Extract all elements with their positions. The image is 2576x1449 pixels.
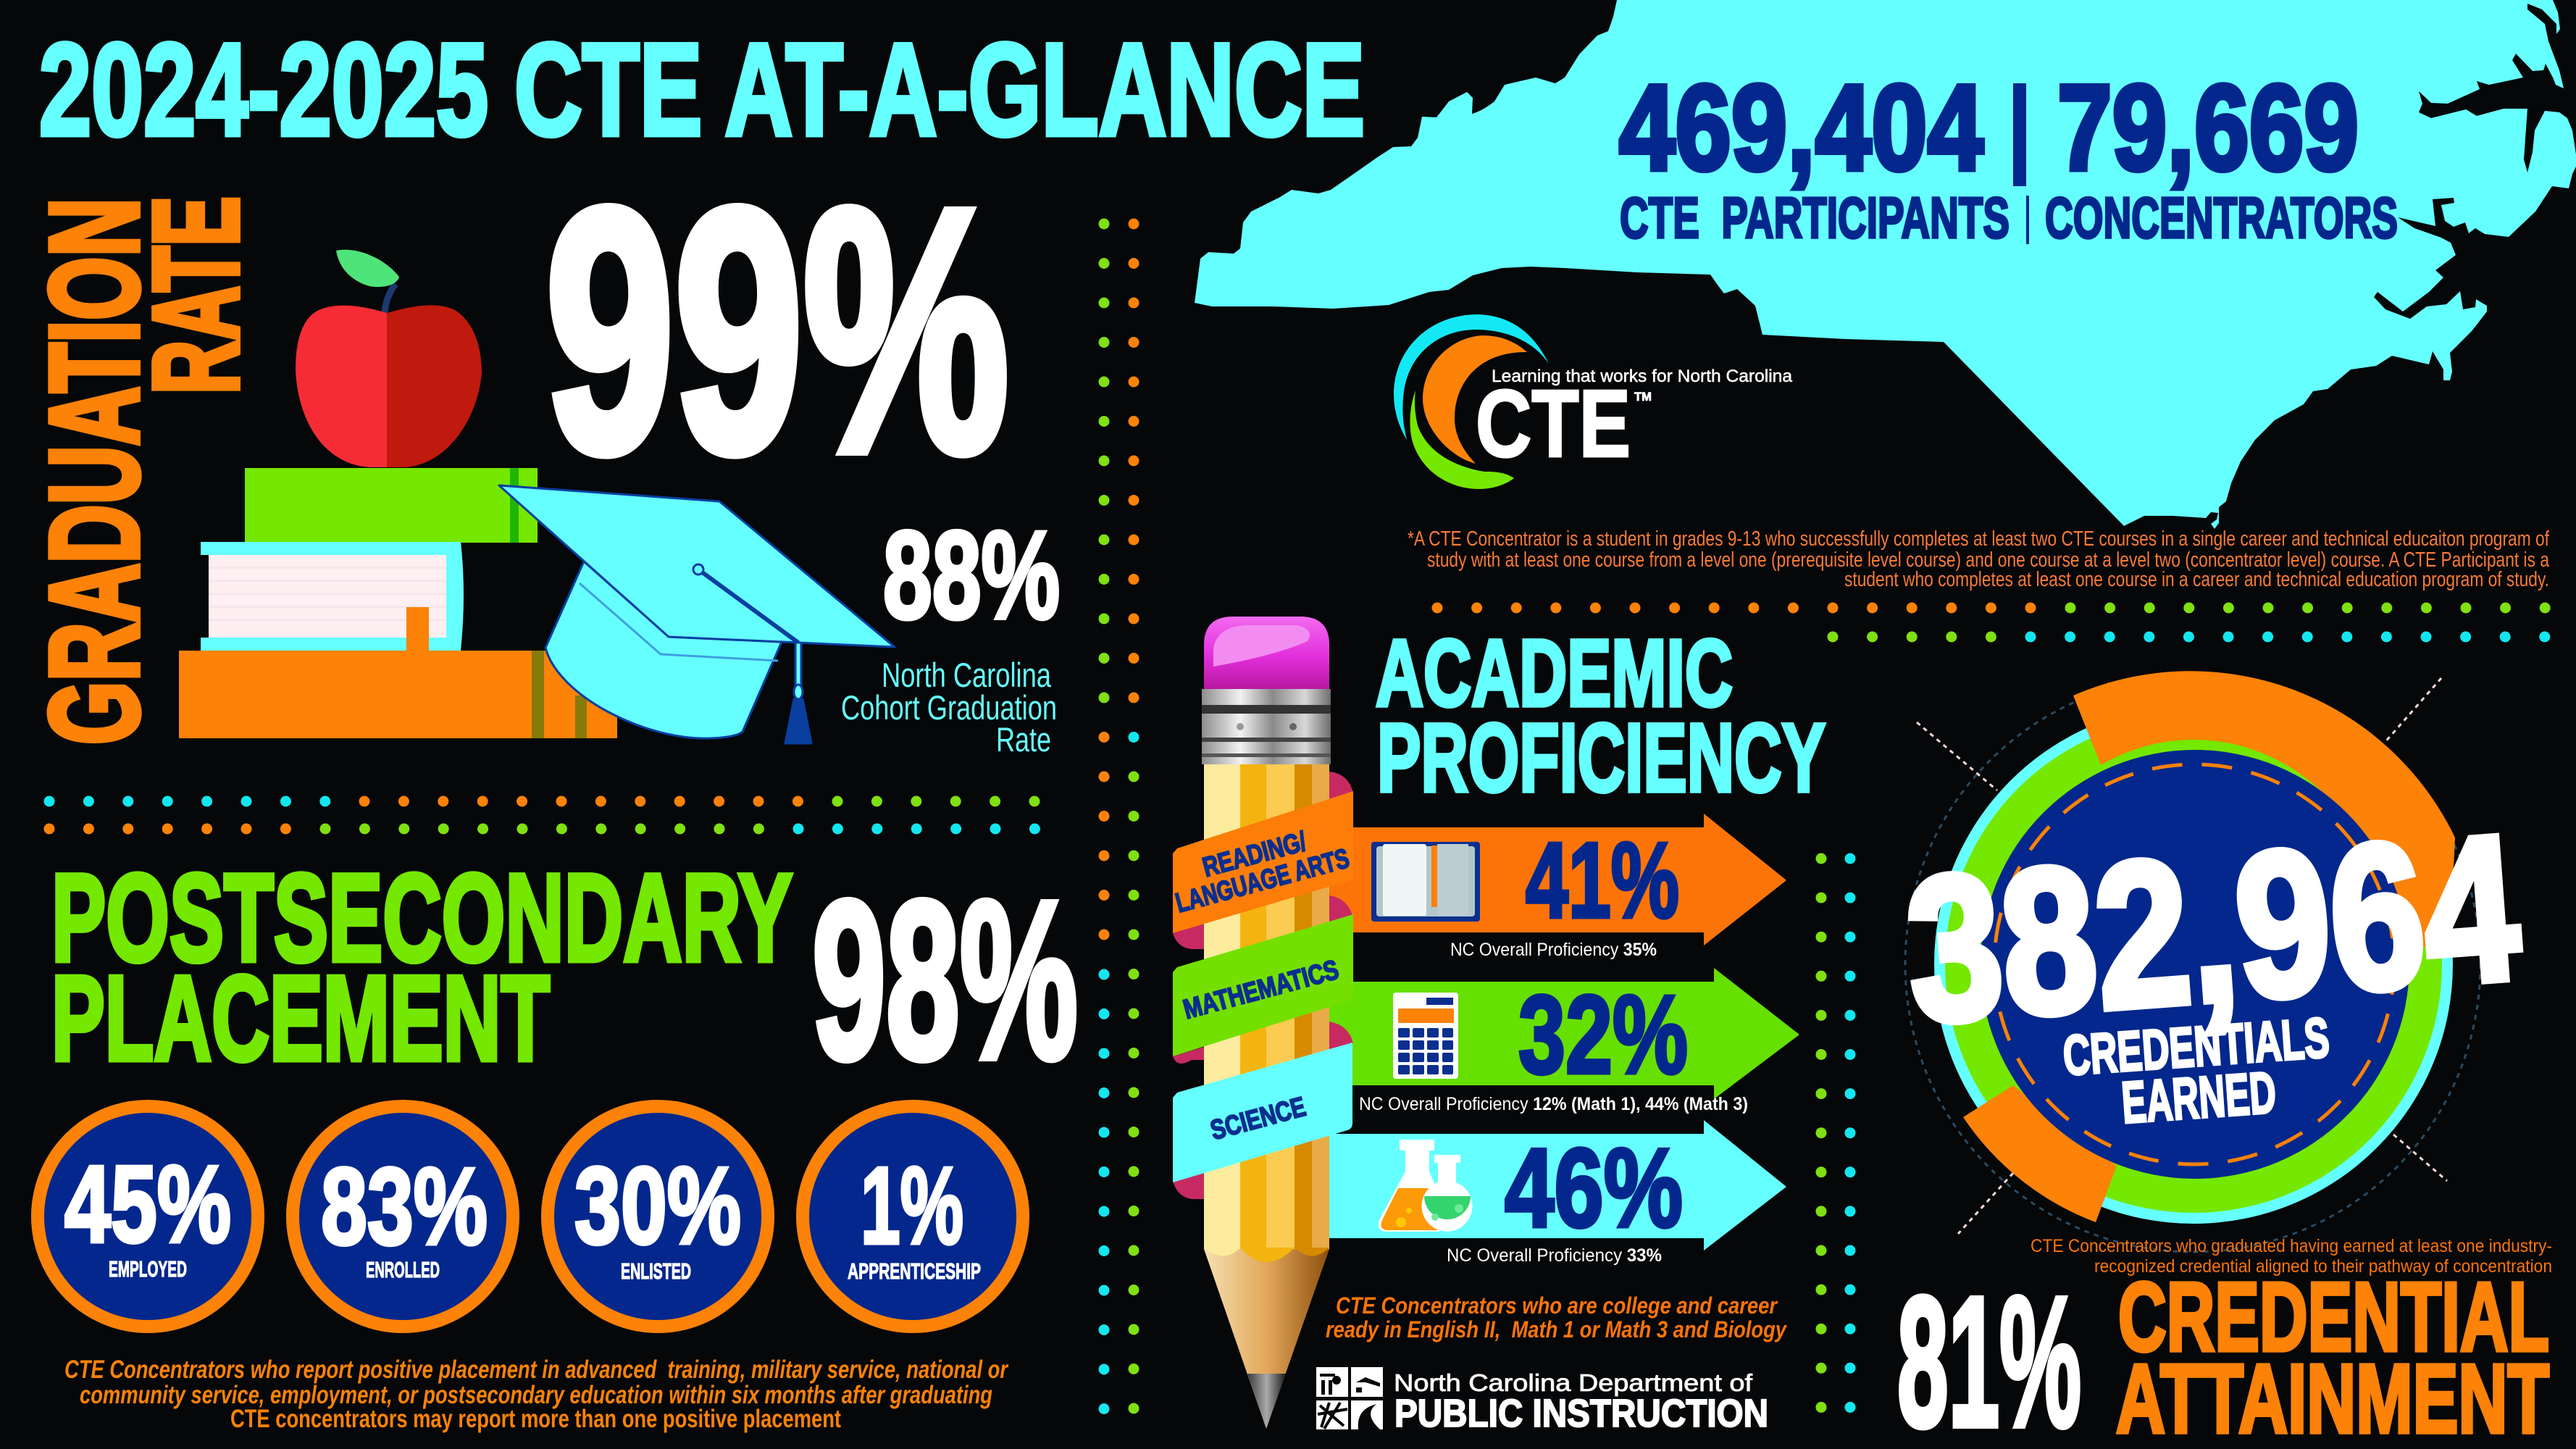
heading: graduation rate: RATE	[129, 196, 264, 394]
CTE logo: Learning that works for North Carolina	[1492, 367, 1793, 386]
heading: credential attainment	[2116, 1262, 2549, 1449]
icon: calculator	[1393, 993, 1458, 1079]
stat: science 46%: 46%	[1505, 1125, 1683, 1250]
badge: apprenticeship: APPRENTICESHIP	[848, 1258, 981, 1284]
panel: postsecondary placement	[38, 848, 1078, 1433]
text: college and career ready note: CTE Concentrators who are college and career	[1336, 1293, 1778, 1319]
heading: postsecondary placement: POSTSECONDARY	[51, 848, 793, 987]
dial: credentials earned circle	[1905, 671, 2480, 1252]
arrow: science	[1329, 1120, 1786, 1250]
participants and concentrators labels: CTE PARTICIPANTS	[1620, 185, 2010, 250]
label: credentials earned	[2061, 1006, 2331, 1136]
icon: flasks	[1379, 1140, 1472, 1232]
text: placement note: CTE concentrators may report more than one positive placement	[230, 1405, 841, 1433]
text: cohort graduation rate label: Rate	[996, 720, 1051, 759]
dots: upper right horizontal rows	[1437, 608, 2554, 637]
caption: mathematics NC proficiency: NC Overall Proficiency 12% (Math 1), 44% (Math 3)	[1359, 1094, 1748, 1114]
ribbon: reading / language arts: READING/	[1200, 827, 1310, 883]
text: credential note	[2031, 1236, 2552, 1277]
text: college and career ready note: ready in English II, Math 1 or Math 3 and Biology	[1326, 1316, 1788, 1342]
badge: enrolled: 83%	[321, 1145, 488, 1267]
badge: apprenticeship: 1%	[861, 1144, 963, 1266]
dots: centre vertical columns	[1104, 224, 1134, 1410]
ribbon: science: SCIENCE	[1208, 1092, 1309, 1146]
ribbon: mathematics	[1173, 914, 1353, 1056]
text: placement note: community service, employment, or postsecondary education within six months after graduating	[80, 1381, 992, 1409]
dots: left horizontal rows	[49, 801, 1037, 829]
participants and concentrators numbers	[1619, 59, 2359, 196]
title: 2024-2025 CTE AT-A-GLANCE	[39, 17, 1365, 163]
NC Department of Public Instruction logo	[1316, 1367, 1768, 1435]
badge: employed: 45%	[64, 1143, 231, 1265]
heading: graduation rate	[23, 196, 264, 745]
heading: postsecondary placement	[51, 848, 793, 1086]
label: credentials earned: EARNED	[2120, 1060, 2278, 1136]
ribbon: reading / language arts: LANGUAGE ARTS	[1173, 843, 1352, 919]
heading: academic proficiency: PROFICIENCY	[1377, 704, 1826, 812]
icon: graduation cap	[499, 485, 895, 743]
badge: enrolled	[293, 1106, 513, 1327]
badge: apprenticeship	[803, 1106, 1023, 1327]
stat: reading 41%: 41%	[1526, 821, 1679, 940]
badge: employed	[38, 1106, 258, 1327]
panel: graduation rate	[23, 138, 1060, 759]
text: cohort graduation rate label: Cohort Graduation	[841, 688, 1057, 727]
CTE logo: TM	[1634, 390, 1652, 404]
icon: open book	[1371, 842, 1480, 922]
heading: postsecondary placement: PLACEMENT	[51, 951, 550, 1086]
ribbon: science	[1173, 1043, 1352, 1182]
text: college and career ready note	[1326, 1293, 1788, 1342]
CTE logo	[1394, 314, 1793, 489]
badge: enlisted: ENLISTED	[621, 1258, 691, 1284]
ribbon backs	[1173, 772, 1353, 1199]
arrow: mathematics	[1329, 968, 1799, 1099]
state silhouette	[1195, 0, 2576, 529]
participants and concentrators numbers: 469,404	[1619, 59, 1983, 196]
stat: mathematics 32%: 32%	[1518, 972, 1688, 1097]
badge: enrolled: ENROLLED	[366, 1257, 440, 1282]
text: placement note	[64, 1356, 1009, 1433]
panel: North Carolina map	[1195, 0, 2576, 529]
heading: academic proficiency	[1376, 619, 1826, 812]
ribbon: mathematics: MATHEMATICS	[1180, 955, 1342, 1025]
stat: 98% placement: 98%	[812, 853, 1078, 1106]
stat: 88% state rate: 88%	[883, 506, 1060, 645]
NC Department of Public Instruction logo: North Carolina Department of	[1394, 1369, 1753, 1396]
caption: reading NC proficiency: NC Overall Proficiency 35%	[1450, 940, 1657, 960]
badge: enlisted	[548, 1106, 768, 1327]
text: cohort graduation rate label	[841, 656, 1057, 759]
text: cohort graduation rate label: North Carolina	[882, 656, 1052, 694]
badge: employed: EMPLOYED	[109, 1256, 187, 1282]
icon: stack of books	[179, 468, 617, 738]
badge: enlisted: 30%	[574, 1144, 741, 1266]
stat: 99% graduation rate: 99%	[545, 138, 1009, 524]
text: placement note: CTE Concentrators who report positive placement in advanced training, military service, national or	[64, 1356, 1009, 1384]
CTE logo: CTE	[1476, 370, 1631, 477]
participants and concentrators labels: CONCENTRATORS	[2045, 185, 2398, 250]
arrow: reading	[1329, 814, 1786, 945]
concentrator definition note	[1408, 527, 2550, 591]
heading: academic proficiency: ACADEMIC	[1376, 619, 1733, 726]
panel: credential attainment	[1897, 671, 2552, 1449]
label: credentials earned: CREDENTIALS	[2061, 1006, 2331, 1087]
panel: academic proficiency	[1173, 617, 1826, 1429]
caption: science NC proficiency: NC Overall Proficiency 33%	[1447, 1245, 1662, 1266]
participants and concentrators numbers: 79,669	[2057, 59, 2359, 196]
icon: apple	[296, 250, 482, 467]
dots: right vertical columns	[1821, 859, 1850, 1409]
NC Department of Public Instruction logo: PUBLIC INSTRUCTION	[1394, 1392, 1768, 1435]
icon: pencil	[1202, 617, 1331, 1429]
ribbon: reading / language arts	[1173, 791, 1353, 933]
